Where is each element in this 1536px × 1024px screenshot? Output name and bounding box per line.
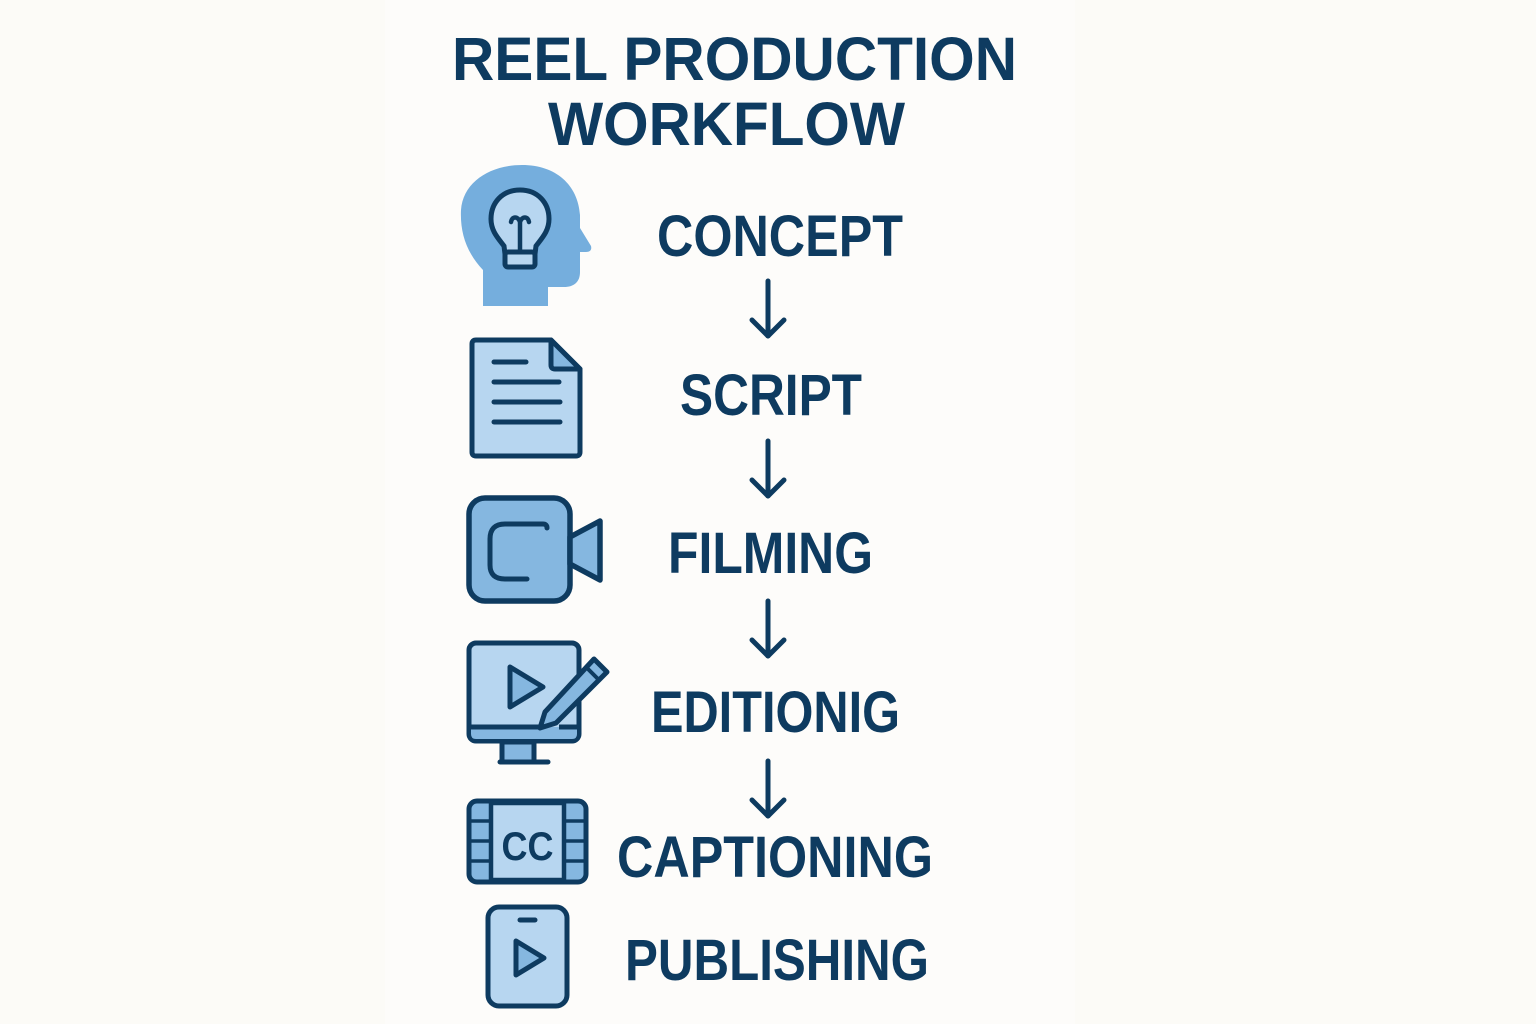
arrow 2 <box>752 441 784 496</box>
title: WORKFLOW <box>548 90 905 158</box>
icon: phone with play <box>488 907 567 1006</box>
icon: captions film strip <box>469 801 586 882</box>
title: REEL PRODUCTION <box>452 25 1017 93</box>
label: filming: FILMING <box>668 521 873 586</box>
arrow 1 <box>752 281 784 336</box>
label: concept: CONCEPT <box>657 204 903 269</box>
icon: head with lightbulb <box>461 165 591 306</box>
icon: script document <box>472 340 580 456</box>
arrow 3 <box>752 601 784 656</box>
icon: monitor with pencil <box>469 643 607 762</box>
label: captioning: CAPTIONING <box>617 825 933 890</box>
arrow 4 <box>752 761 784 816</box>
icon: captions film strip: CC <box>502 825 554 869</box>
icon: video camera <box>469 498 600 601</box>
title <box>452 25 1017 158</box>
label: editing: EDITIONIG <box>651 680 900 745</box>
label: publishing: PUBLISHING <box>625 928 929 993</box>
label: script: SCRIPT <box>680 363 862 428</box>
arrows <box>752 281 784 816</box>
